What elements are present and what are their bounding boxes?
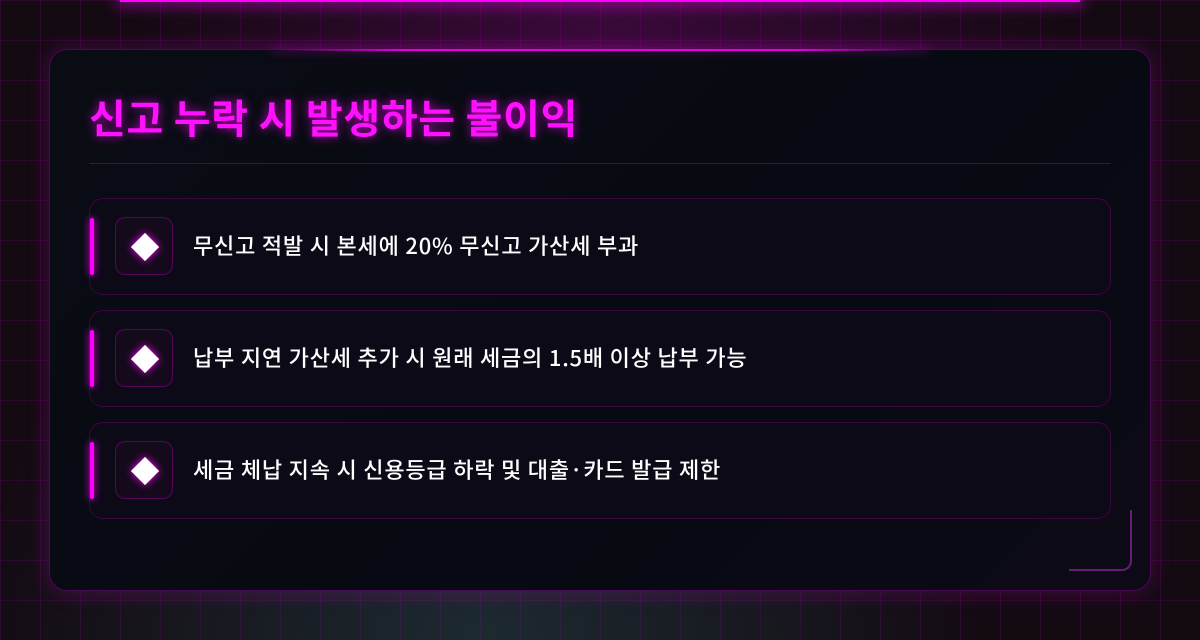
item 3 — [89, 422, 1111, 519]
title: 신고 누락 시 발생하는 불이익 — [89, 87, 578, 145]
text 2: 납부 지연 가산세 추가 시 원래 세금의 1.5배 이상 납부 가능 — [193, 341, 747, 373]
text 3: 세금 체납 지속 시 신용등급 하락 및 대출·카드 발급 제한 — [193, 453, 721, 485]
item 1 — [89, 198, 1111, 295]
icon: diamond — [115, 329, 173, 387]
panel: main card — [49, 49, 1151, 591]
text 1: 무신고 적발 시 본세에 20% 무신고 가산세 부과 — [193, 229, 639, 261]
item 2 — [89, 310, 1111, 407]
icon: diamond — [115, 441, 173, 499]
icon: diamond — [115, 217, 173, 275]
